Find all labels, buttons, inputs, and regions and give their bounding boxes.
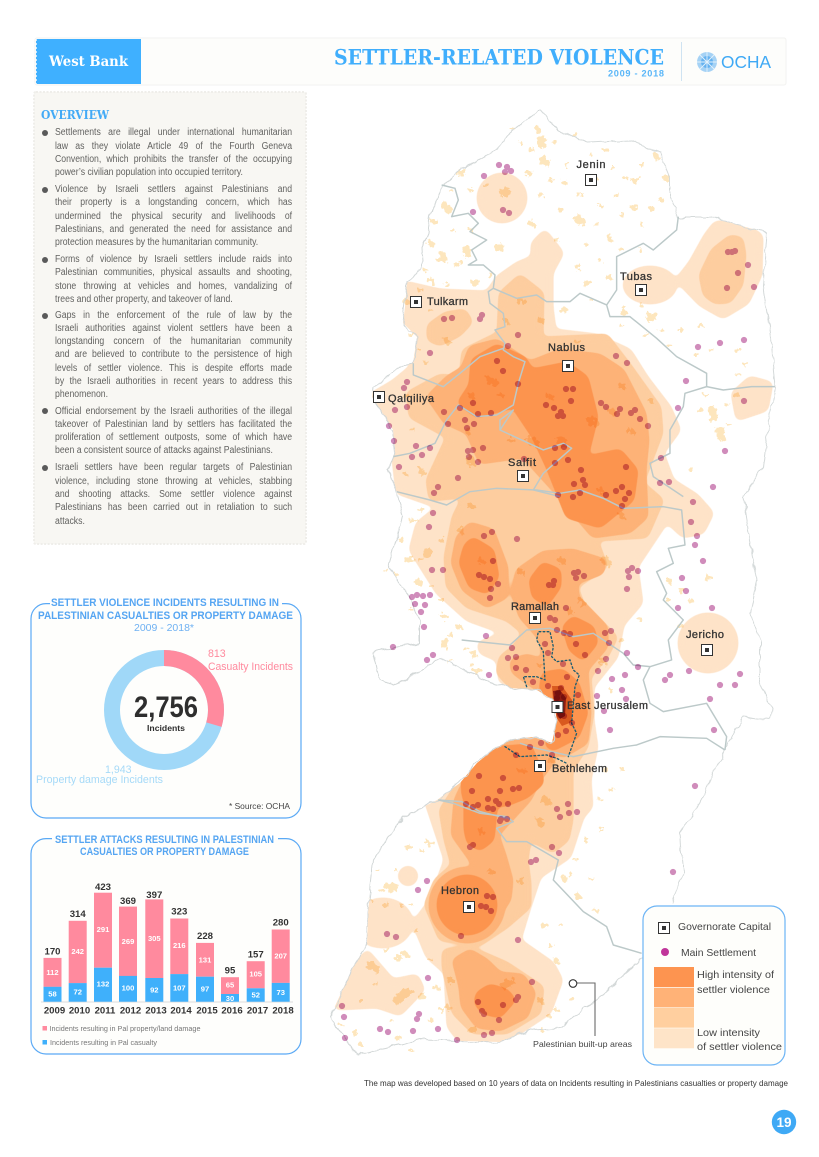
overview text: Gaps in the enforcement of the rule of law by the xyxy=(55,310,292,321)
OCHA logo xyxy=(697,52,771,72)
bar chart: 2016 xyxy=(221,1006,243,1016)
bar chart: 269 xyxy=(122,937,134,946)
capital: Bethlehem xyxy=(534,760,607,775)
bar chart: 92 xyxy=(150,986,159,994)
bar chart: 2014 xyxy=(170,1006,192,1016)
donut heading: SETTLER VIOLENCE INCIDENTS RESULTING IN xyxy=(51,597,279,609)
capital: Qalqiliya xyxy=(374,392,435,405)
overview heading: OVERVIEW xyxy=(41,108,109,122)
overview text: and are believed to contribute to the persistence of high xyxy=(55,349,292,360)
overview text: stone throwing at vehicles and homes, vandalizing of xyxy=(55,280,292,292)
bar chart legend: Incidents resulting in Pal casualty xyxy=(50,1038,157,1047)
property label: Property damage Incidents xyxy=(36,774,163,786)
bar chart: 132 xyxy=(97,980,109,988)
donut chart xyxy=(112,658,216,762)
bar chart: 131 xyxy=(199,956,212,964)
donut total: Incidents xyxy=(147,723,185,733)
overview text: their property is a longstanding concern, which has xyxy=(55,197,292,208)
title: SETTLER-RELATED VIOLENCE xyxy=(334,46,664,70)
date range: 2009 - 2018 xyxy=(608,68,664,78)
legend: intensity scale: Low intensity xyxy=(697,1027,761,1039)
donut heading xyxy=(38,597,293,634)
donut heading: 2009 - 2018* xyxy=(134,622,194,634)
overview text: takeover of Palestinian land by settlers has facilitated the xyxy=(55,419,292,430)
footnote: The map was developed based on 10 years of data on Incidents resulting in Palestinians casualties or property damage xyxy=(364,1078,788,1088)
overview text: Settlements are illegal under international humanitarian xyxy=(55,127,292,138)
bar chart: 216 xyxy=(173,941,186,950)
panel: incidents donut xyxy=(31,597,301,818)
overview text: law as they violate Article 49 of the Fourth Geneva xyxy=(55,140,292,152)
callout: built-up areas xyxy=(533,980,632,1049)
bar chart: 72 xyxy=(73,988,82,996)
capital: Nablus xyxy=(548,342,586,372)
overview text: been a consistent source of attacks against Palestinians. xyxy=(55,445,273,456)
panel: attacks bar chart xyxy=(31,834,301,1054)
casualty label: 813 xyxy=(208,648,226,660)
bar chart: 107 xyxy=(173,984,186,992)
bar chart: 305 xyxy=(148,934,161,943)
bar chart xyxy=(41,882,294,1016)
bar chart: 157 xyxy=(248,950,264,960)
capital: Tulkarm: Tulkarm xyxy=(427,296,468,308)
donut total xyxy=(134,691,198,733)
bar chart: 314 xyxy=(70,909,86,920)
governorate capitals xyxy=(374,159,724,912)
East Jerusalem hotspot xyxy=(552,686,572,726)
West Bank tab: West Bank xyxy=(48,54,128,70)
capital: Salfit xyxy=(508,457,536,482)
legend: intensity scale: settler violence xyxy=(697,984,770,996)
bar chart: 397 xyxy=(146,890,162,901)
heat layers: settler violence intensity xyxy=(333,174,772,1046)
bar chart: 280 xyxy=(273,918,289,928)
capital: Tubas xyxy=(620,271,652,296)
legend: intensity scale: High intensity of xyxy=(697,969,774,981)
overview text: Palestinians, and generated the need for assistance and xyxy=(55,224,292,234)
boundaries: outline and governorate lines xyxy=(330,110,775,1055)
bar chart: 97 xyxy=(201,984,209,994)
legend: intensity scale xyxy=(654,967,782,1053)
panel: overview background xyxy=(34,92,306,544)
capital: Tubas: Tubas xyxy=(620,271,652,283)
main settlements xyxy=(342,165,754,1040)
bar chart heading xyxy=(55,834,274,858)
capital: Qalqiliya: Qalqiliya xyxy=(388,393,435,405)
overview text: trees and other property, and takeover of land. xyxy=(55,294,233,304)
capital: Hebron: Hebron xyxy=(441,885,479,897)
legend: intensity scale: of settler violence xyxy=(697,1041,782,1053)
source note: * Source: OCHA xyxy=(229,801,290,811)
bar chart: 2009 xyxy=(44,1006,65,1016)
capital: Ramallah xyxy=(511,601,559,624)
bullet: forms of violence xyxy=(42,254,292,304)
bar chart: 112 xyxy=(46,968,59,977)
West Bank tab xyxy=(36,39,141,84)
property label: 1,943 xyxy=(105,764,132,776)
bar chart: 58 xyxy=(48,990,57,998)
overview text: protection measures by the humanitarian community. xyxy=(55,236,258,248)
bar chart: 52 xyxy=(251,990,260,1000)
property label xyxy=(36,764,163,786)
callout: built-up areas: Palestinian built-up areas xyxy=(533,1039,632,1049)
bar chart: 30 xyxy=(226,994,234,1003)
bar chart: 369 xyxy=(120,896,136,907)
capital: Bethlehem: Bethlehem xyxy=(552,763,607,775)
overview text: Israeli settlers have been regular targets of Palestinian xyxy=(55,462,292,473)
capital: Nablus: Nablus xyxy=(548,342,586,354)
bar chart legend: Incidents resulting in Pal property/land damage xyxy=(50,1024,200,1033)
overview text: power’s civilian population into occupied territory. xyxy=(55,167,243,178)
overview text: Violence by Israeli settlers against Palestinians and xyxy=(55,184,292,195)
overview text: and shooting attacks. Some settler violence against xyxy=(55,489,292,500)
page number: 19 xyxy=(776,1115,792,1130)
bar chart: 2010 xyxy=(69,1006,90,1016)
capital: Jenin xyxy=(576,159,606,186)
overview text: phenomenon. xyxy=(55,389,108,400)
map legend xyxy=(643,906,785,1065)
overview text: by the Israeli authorities in recent years to address this xyxy=(55,376,292,386)
bar chart: 323 xyxy=(171,906,187,918)
white gap north-west of Ramallah xyxy=(498,493,543,545)
capital: Hebron xyxy=(441,885,479,912)
bar chart: 291 xyxy=(97,925,110,934)
bullet: longstanding concern xyxy=(42,184,292,248)
legend: governorate capital: Governorate Capital xyxy=(678,921,771,933)
overview text: Convention, which prohibits the transfer of the occupying xyxy=(55,154,292,165)
capital: Jericho xyxy=(686,629,724,656)
bar chart: 228 xyxy=(197,931,214,942)
capital: Jericho: Jericho xyxy=(686,629,724,641)
bullet: rule of law gaps xyxy=(42,310,292,400)
overview text: violence, including stone throwing at vehicles, stabbing xyxy=(55,476,292,486)
donut total: 2,756 xyxy=(134,691,198,724)
overview text: undermined the physical security and livelihoods of xyxy=(55,210,292,222)
overview text: Palestinian communities, physical assaults and shooting, xyxy=(55,267,292,278)
bar chart: 95 xyxy=(225,966,236,976)
bar chart: 73 xyxy=(276,988,285,997)
Jerusalem and Bethlehem dotted boundary xyxy=(505,632,579,763)
map xyxy=(330,110,775,1055)
bar chart: 2012 xyxy=(120,1006,141,1016)
bullet: Palestinian violence xyxy=(42,462,292,526)
bar chart: 170 xyxy=(44,946,61,958)
donut heading: PALESTINIAN CASUALTIES OR PROPERTY DAMAGE xyxy=(38,610,293,622)
casualty label xyxy=(208,648,293,673)
capital: Jenin: Jenin xyxy=(576,159,606,171)
bar chart: 207 xyxy=(274,952,287,960)
overview text: Official endorsement by the Israeli authorities of the illegal xyxy=(55,406,292,416)
overview text: levels of settler violence. This is despite efforts made xyxy=(55,362,292,374)
bar chart heading: CASUALTIES OR PROPERTY DAMAGE xyxy=(80,846,249,858)
bar chart: 100 xyxy=(122,984,134,992)
bar chart: 242 xyxy=(71,947,84,956)
capital: East Jerusalem: East Jerusalem xyxy=(567,700,648,712)
bar chart: 65 xyxy=(226,980,235,990)
bar chart heading: SETTLER ATTACKS RESULTING IN PALESTINIAN xyxy=(55,834,274,846)
capital: Ramallah: Ramallah xyxy=(511,601,559,613)
bar chart: 2011 xyxy=(95,1006,116,1016)
OCHA logo: OCHA xyxy=(721,52,771,72)
bar chart: 2018 xyxy=(272,1006,294,1016)
bar chart: 105 xyxy=(249,970,263,978)
bar chart: 423 xyxy=(95,882,111,893)
overview text: attacks. xyxy=(55,516,85,526)
overview text xyxy=(42,127,292,526)
overview text: Israeli authorities against violent settlers have been a xyxy=(55,323,292,334)
bar chart: 2015 xyxy=(196,1006,218,1016)
bar chart: 2013 xyxy=(145,1006,167,1016)
bar chart: 2017 xyxy=(247,1006,268,1016)
legend: main settlement: Main Settlement xyxy=(681,947,756,959)
overview text: longstanding concern of the humanitarian community xyxy=(55,336,292,347)
overview text: proliferation of settlement outposts, some of which have xyxy=(55,432,292,443)
overview text: Palestinians has been carried out in retaliation to such xyxy=(55,502,292,513)
capital: Salfit: Salfit xyxy=(508,457,536,469)
bullet: illegal settlements xyxy=(42,127,292,178)
Palestinian built-up areas xyxy=(340,128,747,1050)
overview text: Forms of violence by Israeli settlers include raids into xyxy=(55,254,292,265)
bullet: official endorsement xyxy=(42,406,292,456)
page number xyxy=(772,1110,796,1134)
bar chart legend xyxy=(42,1024,200,1047)
header bar xyxy=(35,38,786,85)
casualty label: Casualty Incidents xyxy=(208,661,293,673)
